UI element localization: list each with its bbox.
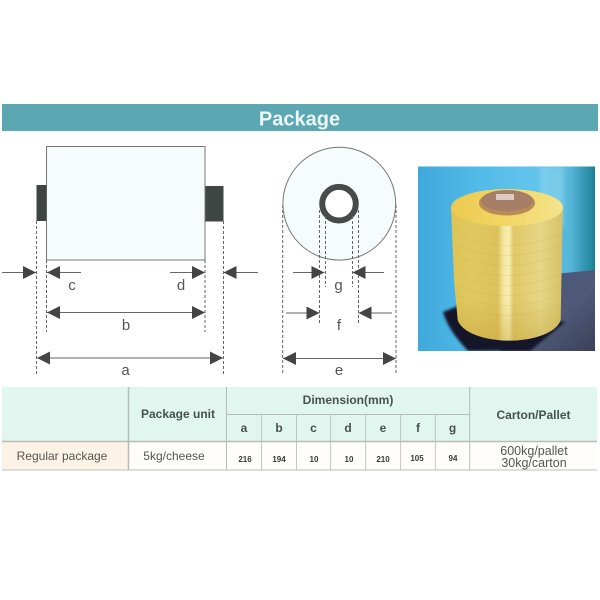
photo: yellow yarn cheese [418,166,595,352]
column headings: Dimension(mm) [303,393,393,407]
column headings: e [380,421,387,435]
photo background [418,166,595,352]
cheese body side view [46,146,205,260]
row: regular package [17,444,568,470]
data table [2,387,597,470]
regular package cell [2,442,128,470]
dimension d [170,272,258,294]
right core block [206,186,224,222]
column headings: f [416,421,421,435]
yarn body [451,207,563,341]
table grid [2,387,597,470]
header banner [2,104,598,131]
side view diagram [2,146,258,379]
column headings: a [241,421,248,435]
row: regular package: 30kg/carton [501,456,567,470]
dimension a: a [121,362,130,379]
column headings [141,393,571,435]
column headings: b [275,421,283,435]
table surface [500,270,595,351]
cast shadow [443,306,565,351]
heading: Package: Package [259,108,340,130]
front view extension lines [283,205,396,373]
dimension f: f [337,317,342,334]
row: regular package: 105 [410,454,424,463]
row: regular package: 194 [272,455,286,464]
dimension e: e [335,362,343,379]
dimension e [283,358,396,379]
winding texture [456,235,560,316]
core rim [479,196,535,216]
dimension c: c [68,277,76,294]
front view diagram [283,147,396,379]
dimension c [2,272,81,294]
row: regular package: Regular package [17,449,108,463]
row: regular package: 5kg/cheese [143,449,205,463]
row: regular package: 10 [345,455,354,464]
core ring [322,187,356,220]
side view extension lines [36,221,224,374]
row: regular package: 94 [449,454,458,463]
dimension b: b [122,317,130,334]
row: regular package: 600kg/pallet [500,444,568,458]
cheese circle [283,147,396,260]
row: regular package: 10 [310,455,319,464]
core label [496,194,514,200]
column headings: d [344,421,352,435]
column headings: Carton/Pallet [496,408,571,422]
dimension f [286,313,392,334]
top face [451,189,563,226]
infographic canvas [2,104,598,471]
column headings: Package unit [141,407,215,421]
column headings: c [310,421,317,435]
dimension g [293,272,384,294]
dimension d: d [177,277,185,294]
left core block [36,185,46,221]
table header background [2,387,597,442]
row: regular package: 216 [238,455,252,464]
column headings: g [449,421,456,435]
row: regular package: 210 [376,455,390,464]
dimension g: g [334,277,343,294]
